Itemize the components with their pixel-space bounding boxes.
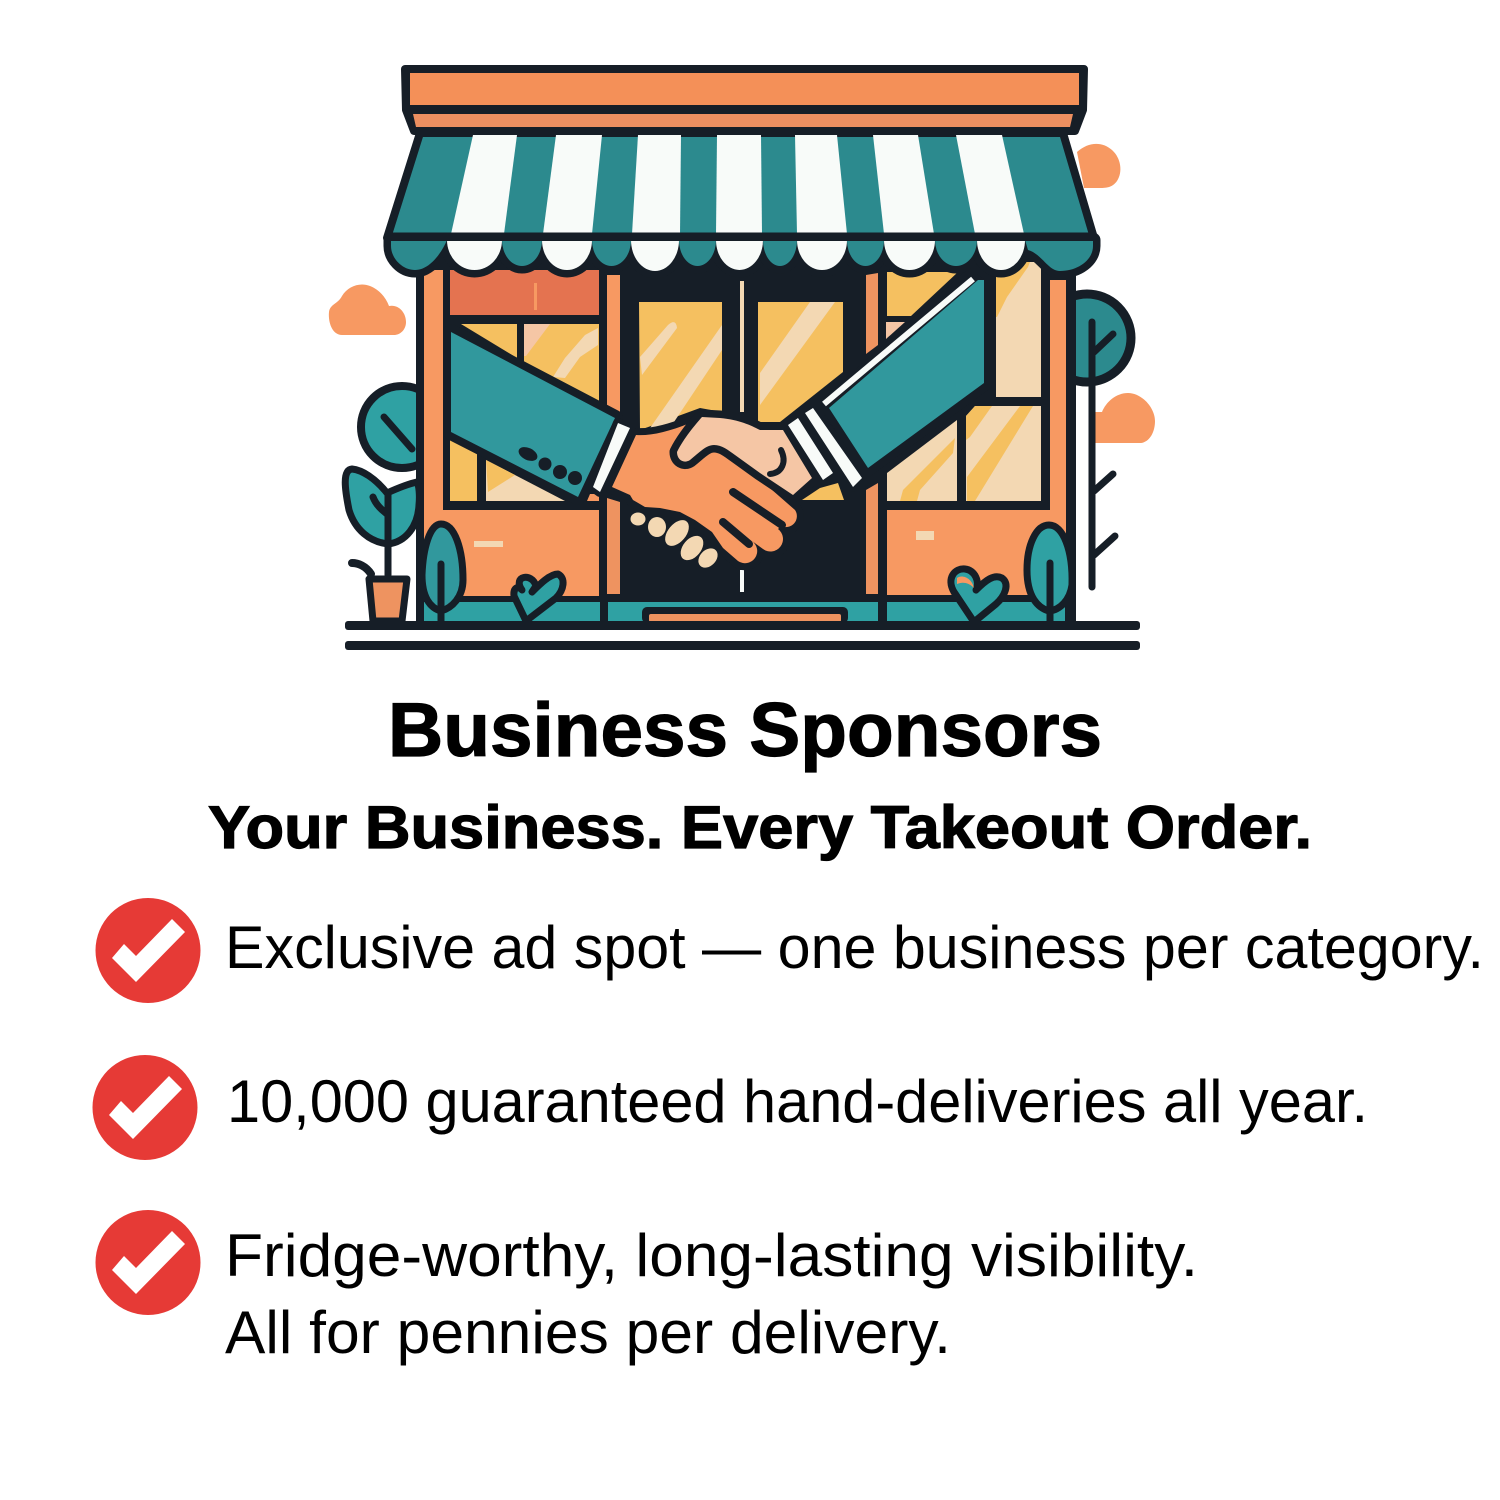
subtitle: Your Business. Every Takeout Order. — [208, 794, 1312, 861]
cloud: left — [329, 284, 406, 335]
thumb crease — [770, 450, 784, 474]
tree: small left — [422, 524, 463, 622]
ground lines — [345, 621, 1140, 650]
plant: potted left — [345, 469, 419, 621]
tree: small right — [1027, 525, 1072, 622]
title: Business Sponsors — [388, 688, 1102, 773]
window: right — [886, 262, 1041, 501]
text: fridge-worthy: Fridge-worthy, long-lasting visibility. — [225, 1222, 1198, 1289]
scallop outline — [391, 240, 1093, 271]
icon: check 1 — [96, 898, 200, 1003]
plant: heart left — [514, 574, 563, 621]
text: fridge-worthy: All for pennies per delivery. — [225, 1299, 951, 1366]
orange hand — [612, 423, 797, 563]
peach hand outline — [677, 417, 812, 495]
text: guaranteed deliveries: 10,000 guaranteed hand-deliveries all year. — [227, 1068, 1368, 1135]
orange hand outline — [612, 423, 797, 563]
text: fridge-worthy — [225, 1222, 1198, 1366]
sleeve buttons — [516, 444, 582, 485]
text: exclusive ad spot: Exclusive ad spot — one business per category. — [225, 914, 1484, 981]
window: left — [450, 324, 599, 501]
roof — [405, 69, 1084, 131]
tree: tall right — [1043, 294, 1131, 587]
window: centre panes — [639, 302, 844, 500]
peach hand — [677, 417, 812, 495]
building body — [416, 250, 1076, 625]
plant: heart right — [951, 569, 1006, 622]
fingers behind — [630, 512, 721, 571]
tree: round left — [361, 386, 443, 468]
benefit 1 — [96, 898, 1484, 1003]
cuffs: right arm — [788, 408, 862, 487]
cuff: left arm — [593, 423, 630, 492]
stripes — [451, 135, 1024, 234]
benefit 2 — [92, 1055, 1368, 1160]
icon: check 2 — [92, 1055, 198, 1160]
sleeve: right arm — [823, 268, 988, 473]
cloud: lower right — [1090, 393, 1155, 443]
canopy — [387, 133, 1094, 238]
scallops white — [447, 240, 1025, 271]
awning — [387, 69, 1094, 271]
illustration: storefront with handshake — [329, 69, 1155, 650]
icon: check 3 — [96, 1210, 200, 1315]
handshake — [612, 417, 812, 571]
finger slits — [723, 492, 782, 544]
scallops teal — [391, 240, 1093, 271]
sleeve: left arm — [451, 332, 615, 497]
benefit 3 — [96, 1210, 1198, 1366]
cloud: top right — [1077, 144, 1120, 188]
